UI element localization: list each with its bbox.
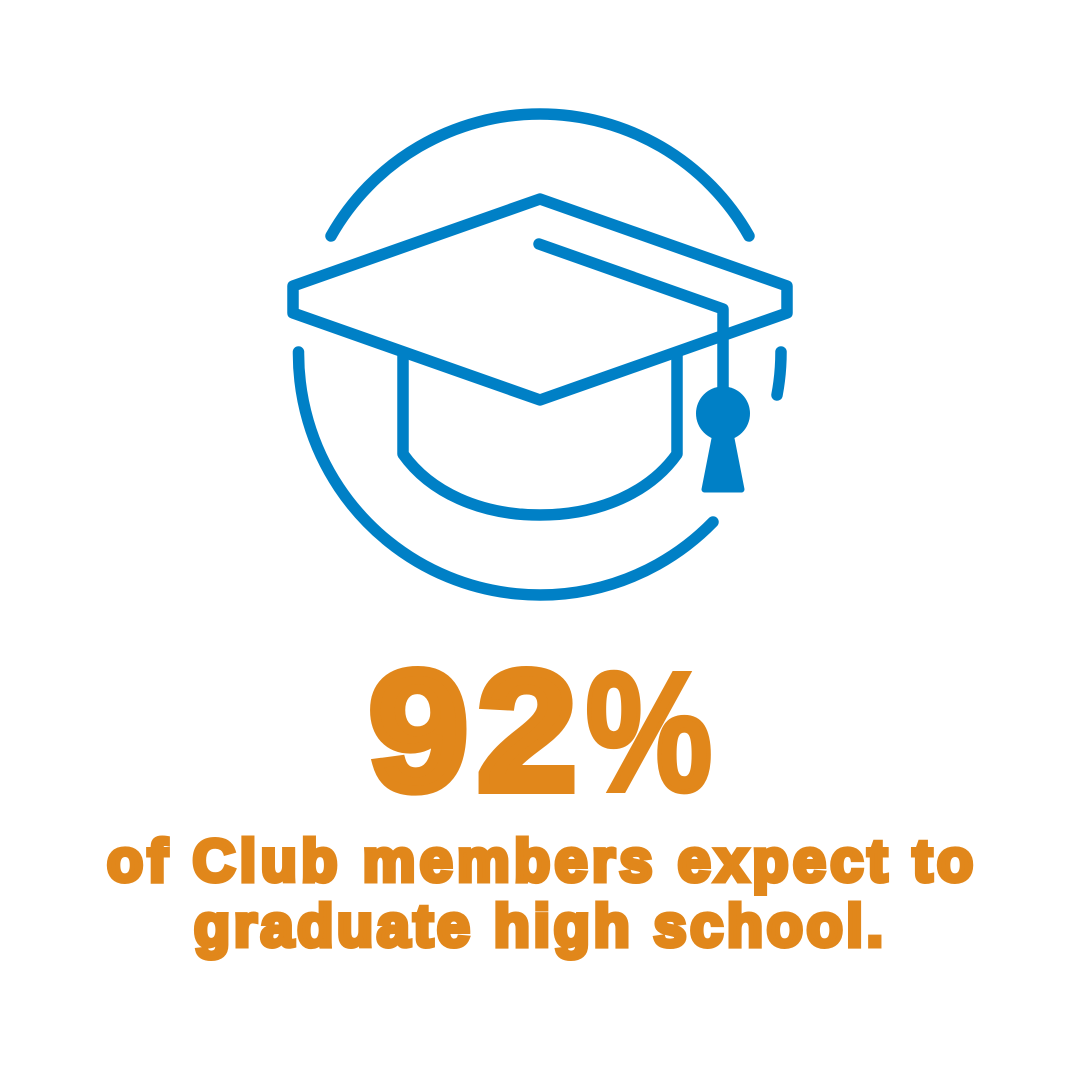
caption text: of Club members expect to <box>107 828 973 894</box>
caption text: graduate high school. <box>194 893 883 959</box>
tassel cord <box>539 244 723 395</box>
cap base <box>403 355 677 515</box>
statistic: 92%: % <box>586 638 712 827</box>
bottom arc <box>298 352 713 595</box>
right small arc <box>777 352 781 395</box>
statistic: 92% <box>369 636 712 827</box>
caption text <box>107 828 973 959</box>
statistic: 92%: 2 <box>478 636 576 825</box>
top arc <box>331 114 749 236</box>
statistic: 92%: 9 <box>369 636 468 825</box>
icon: graduation cap with circular arcs <box>293 114 787 595</box>
cap board <box>293 199 787 400</box>
icon: tassel <box>696 386 750 490</box>
